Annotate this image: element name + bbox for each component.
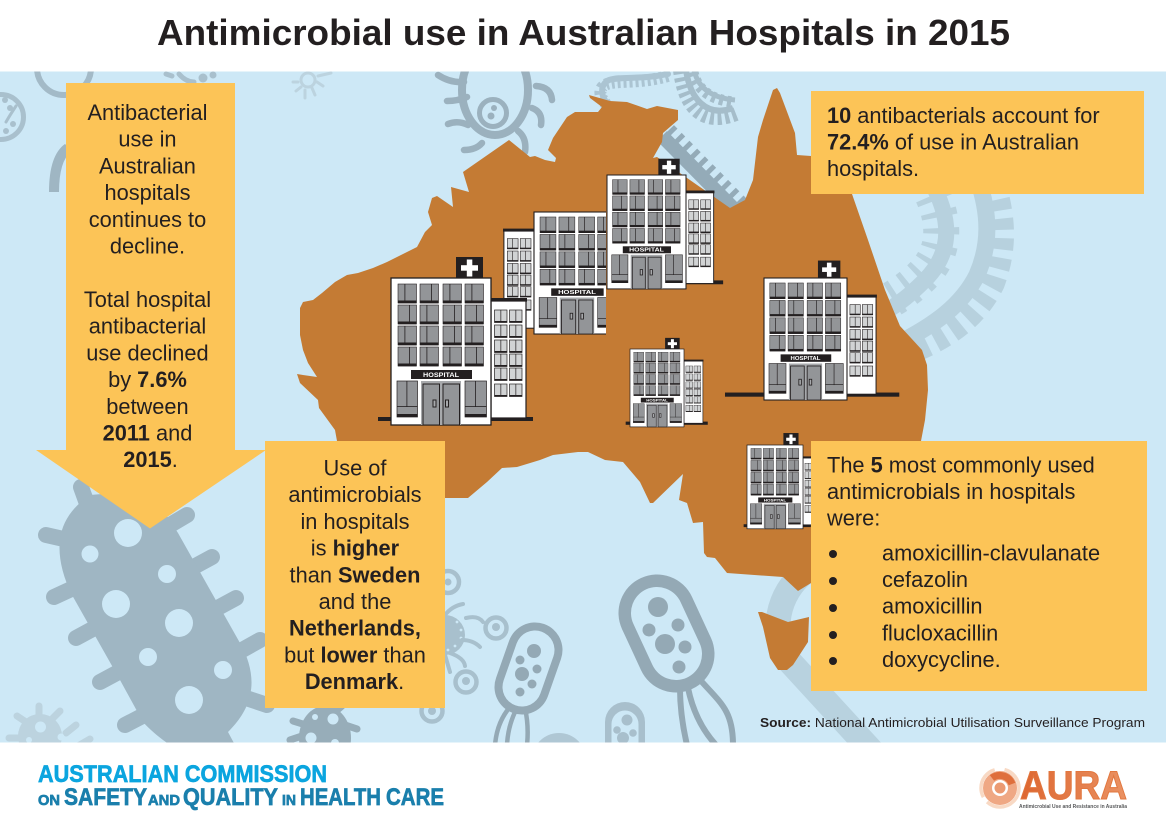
hospital building, lower right: HOSPITAL [764,497,787,502]
map: Tasmania [758,612,809,670]
callout: international comparison [265,441,445,708]
hospital building, lower right [744,433,823,529]
callout: 5 most common antimicrobials: cefazolin [882,567,968,592]
bacterium: top worm, light [600,74,668,108]
bacterium: large faded gear, right [875,180,998,347]
callout: international comparison: antimicrobials [288,482,422,507]
callout arrow: antibacterial decline [36,83,266,528]
callout: international comparison: but lower than [284,642,426,667]
callout: international comparison: is higher [311,536,399,561]
logo: Australian Commission on Safety and Quality in Health Care: SAFETY [64,784,147,811]
hospital building, large left [378,257,533,425]
callout arrow: antibacterial decline: by 7.6% [108,367,187,392]
callout arrow: antibacterial decline: Antibacterial [87,100,207,125]
logo: Australian Commission on Safety and Quality in Health Care: AND [148,792,180,809]
bacterium: dark virus, bottom centre [286,708,360,742]
hospital building, top: HOSPITAL [629,248,664,254]
bacterium: diagonal toothed strand behind the map [662,130,747,215]
bacterium: small capsule with tails [495,644,542,745]
logo: Australian Commission on Safety and Quality in Health Care: ON [38,792,60,809]
logo: AURA [981,764,1128,810]
callout: top 10 antibacterials: hospitals. [827,156,919,181]
AURA roundel [981,769,1019,807]
hospital building, large left: HOSPITAL [423,372,459,379]
hospital building, right: HOSPITAL [791,356,821,362]
callout: 5 most common antimicrobials: amoxicillin-clavulanate [882,540,1100,566]
callout: 5 most common antimicrobials: antimicrobials in hospitals [827,479,1075,504]
callout arrow: antibacterial decline: antibacterial [89,314,206,339]
callout arrow: antibacterial decline: Total hospital [84,287,211,312]
callout: top 10 antibacterials [811,91,1144,194]
bacterium: faded virus, bottom left [6,702,94,742]
callout arrow: antibacterial decline: decline. [110,234,185,258]
logo: Australian Commission on Safety and Quality in Health Care [38,761,444,811]
map of Australia [297,88,928,670]
bacterium: small spider and rings, centre [422,571,506,722]
bacterium: top centre small sun [293,73,331,98]
bacterium: top spider oval [434,72,556,154]
logo: AURA: Antimicrobial Use and Resistance in Australia [1019,804,1128,810]
list bullets [829,550,837,665]
logo: Australian Commission on Safety and Quality in Health Care: IN [282,792,296,809]
hospital building, small centre: HOSPITAL [646,398,669,402]
callout: top 10 antibacterials: 10 antibacterials account for [827,103,1100,128]
hospital building, back centre [503,211,606,335]
hospital building, small centre [626,338,708,427]
bacterium: large spiked body, lower left [46,487,267,745]
logo: Australian Commission on Safety and Quality in Health Care: CARE [386,784,444,811]
callout: 5 most common antimicrobials: flucloxacillin [882,620,998,645]
logo: Australian Commission on Safety and Quality in Health Care: AUSTRALIAN COMMISSION [38,761,327,788]
callout: international comparison: than Sweden [290,562,420,587]
callout arrow: antibacterial decline: continues to [89,207,206,232]
callout arrow: antibacterial decline: 2011 and [103,420,192,446]
callout: 5 most common antimicrobials [811,441,1147,691]
callout arrow: antibacterial decline: between [106,394,189,419]
bacterium: faded capsule, bottom [538,702,645,742]
callout arrow: antibacterial decline: use in [118,127,177,152]
callout: international comparison: Use of [323,456,387,480]
callout: 5 most common antimicrobials: were: [826,506,880,530]
callout arrow: antibacterial decline: use declined [86,340,209,365]
hospital building, top [607,159,723,289]
callout arrow: antibacterial decline: Australian [99,153,196,178]
callout: international comparison: Denmark. [305,669,404,694]
bacterium: top dots by the arrow [166,72,216,82]
background bacteria illustrations [0,41,998,787]
logo: Australian Commission on Safety and Quality in Health Care: QUALITY [183,784,278,811]
bacterium: top worm, right curve [680,70,736,118]
logo: AURA: AURA [1020,764,1127,808]
callout: top 10 antibacterials: 72.4% of use in Australian [827,130,1079,155]
callout arrow: antibacterial decline: hospitals [104,180,191,205]
callout: 5 most common antimicrobials: doxycycline. [882,647,1001,672]
source note: Source: National Antimicrobial Utilisation Surveillance Program [760,715,1145,730]
logo: Australian Commission on Safety and Quality in Health Care: HEALTH [300,784,381,811]
bacterium: large faded band, lower right [778,572,880,760]
callout: 5 most common antimicrobials: amoxicillin [882,594,983,619]
callout: international comparison: in hospitals [300,509,410,534]
title: Antimicrobial use in Australian Hospitals in 2015 [157,12,1010,53]
callout arrow: antibacterial decline: 2015. [123,447,178,472]
hospital building, back centre: HOSPITAL [558,290,597,296]
callout: international comparison: and the [319,589,391,614]
hospital building, right [725,261,899,400]
callout: international comparison: Netherlands, [289,616,421,641]
bacterium: large capsule with tails [642,597,733,745]
bacterium: top left ring [0,72,94,192]
callout: 5 most common antimicrobials: The 5 most commonly used [827,452,1095,478]
